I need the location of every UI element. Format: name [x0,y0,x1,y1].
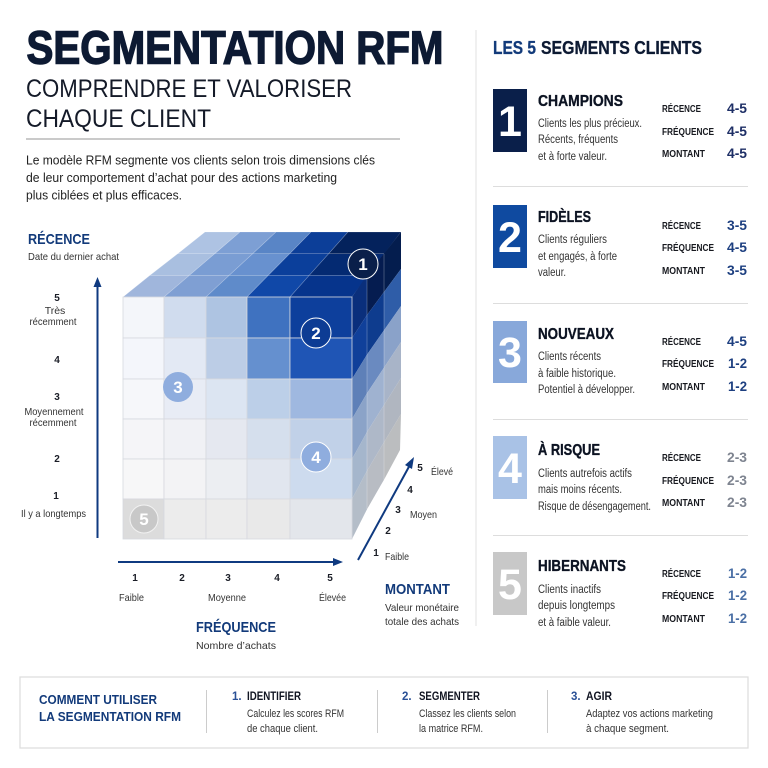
axis: récence: 4 [54,355,60,366]
segment 4: à risque: 2-3 [727,494,747,510]
segment 2: fidèles: RÉCENCE [662,219,701,232]
segment 4: à risque: MONTANT [662,498,705,509]
segment 5: hibernants [493,552,747,629]
axis: montant [358,457,459,628]
how-to heading [39,692,181,724]
subtitle [26,75,352,133]
axis: récence: récemment [30,417,77,429]
segment 2: fidèles: 4-5 [727,239,747,255]
segment 2: fidèles: FIDÈLES [538,207,591,226]
segment 1: champions: MONTANT [662,149,705,160]
step 3: AGIR [586,691,613,703]
how-to heading: COMMENT UTILISER [39,692,158,707]
axis: montant: 2 [385,526,391,537]
step 3: 3. [571,691,581,703]
segment 2: fidèles: valeur. [538,267,566,279]
segment 1: champions: 4-5 [727,100,747,116]
segment 2: fidèles: 2 [498,214,522,262]
segment 5: hibernants: RÉCENCE [662,567,701,580]
segment 4: à risque: mais moins récents. [538,484,622,496]
segment 1: champions: CHAMPIONS [538,93,623,110]
segment 5: hibernants: FRÉQUENCE [662,589,714,602]
segment 2: fidèles: 3-5 [727,217,747,233]
cube top face [123,232,401,297]
step 2: Classez les clients selon [419,708,516,720]
segments heading: SEGMENTS CLIENTS [541,38,702,58]
segments heading: LES 5 [493,38,536,58]
marker 3: 3 [173,378,183,397]
axis: récence: 1 [53,491,59,502]
cube front face [123,297,352,539]
segment 3: nouveaux: RÉCENCE [662,335,701,348]
axis: fréquence: 5 [327,573,333,584]
step 1: IDENTIFIER [247,691,302,703]
segment 2: fidèles: Clients réguliers [538,234,607,246]
segment 3: nouveaux: 1-2 [728,355,747,371]
step 2: la matrice RFM. [419,723,483,735]
marker 3 [163,372,193,402]
step 1: de chaque client. [247,723,318,735]
axis: fréquence: Moyenne [208,592,246,604]
step 3 [571,691,713,735]
segment 3: nouveaux: Clients récents [538,351,601,363]
segment 1: champions: 1 [498,98,522,146]
segment 5: hibernants: HIBERNANTS [538,558,626,575]
segment 3: nouveaux [493,321,747,396]
axis: récence: Très [45,305,65,317]
marker 1: 1 [358,255,368,274]
title: SEGMENTATION RFM [26,22,444,74]
axis: fréquence: 1 [132,573,138,584]
marker 5: 5 [139,510,149,529]
segment 4: à risque: Clients autrefois actifs [538,468,632,480]
step 3: Adaptez vos actions marketing [586,708,713,720]
intro text: de leur comportement d’achat pour des actions marketing [26,171,337,185]
axis: récence: 5 [54,293,60,304]
segment 5: hibernants: et à faible valeur. [538,617,611,629]
step 2: SEGMENTER [419,691,481,703]
segment 2: fidèles: MONTANT [662,266,705,277]
segment 3: nouveaux: FRÉQUENCE [662,357,714,370]
RFM cube chart [123,232,401,539]
axis: fréquence [118,558,346,652]
axis: fréquence: 4 [274,573,280,584]
segment 2: fidèles: FRÉQUENCE [662,241,714,254]
intro text: plus ciblées et plus efficaces. [26,188,182,202]
step 2 [402,691,516,735]
step 3: à chaque segment. [586,723,669,735]
segment 3: nouveaux: 4-5 [727,333,747,349]
axis: fréquence: 3 [225,573,231,584]
axis: récence: 2 [54,454,60,465]
step 2: 2. [402,691,412,703]
subtitle: COMPRENDRE ET VALORISER [26,75,352,103]
segment 1: champions: Clients les plus précieux. [538,118,642,130]
segment 4: à risque: Risque de désengagement. [538,501,651,513]
segment 1: champions: Récents, fréquents [538,134,618,146]
axis: récence: Il y a longtemps [21,508,86,520]
marker 4: 4 [311,448,321,467]
axis: récence: Date du dernier achat [28,251,119,263]
segments heading [493,38,702,58]
axis: récence: RÉCENCE [28,231,90,248]
axis: montant: 5 [417,463,423,474]
intro text: Le modèle RFM segmente vos clients selon trois dimensions clés [26,154,375,168]
axis: montant: MONTANT [385,581,450,598]
marker 2 [301,318,331,348]
segment 4: à risque [493,436,747,513]
panel: how to use [20,677,748,748]
axis: fréquence: 2 [179,573,185,584]
segment 5: hibernants: 1-2 [728,565,747,581]
axis: montant: totale des achats [385,616,459,628]
axis: récence: 3 [54,392,60,403]
axis: récence: récemment [30,316,77,328]
segment 2: fidèles [493,205,747,279]
segment 3: nouveaux: 1-2 [728,378,747,394]
axis: montant: Valeur monétaire [385,602,459,614]
axis: montant: Faible [385,551,409,563]
how-to heading: LA SEGMENTATION RFM [39,709,181,724]
segment 5: hibernants: MONTANT [662,614,705,625]
axis: récence [21,231,119,538]
step 1 [232,691,344,735]
segment 3: nouveaux: 3 [498,329,522,377]
segment 5: hibernants: Clients inactifs [538,584,601,596]
segment 1: champions: 4-5 [727,145,747,161]
axis: montant: 3 [395,505,401,516]
segment 3: nouveaux: NOUVEAUX [538,326,614,343]
segment 2: fidèles: et engagés, à forte [538,251,617,263]
segment 4: à risque: RÉCENCE [662,451,701,464]
segment 5: hibernants: 5 [498,561,522,609]
segment 3: nouveaux: Potentiel à développer. [538,384,635,396]
segment 1: champions [493,89,747,163]
segment 1: champions: 4-5 [727,123,747,139]
segment 3: nouveaux: à faible historique. [538,368,616,380]
cube right face [352,232,401,539]
step 1: 1. [232,691,242,703]
intro text [26,154,375,202]
axis: montant: 1 [373,548,379,559]
marker 1 [348,249,378,279]
axis: montant: 4 [407,485,413,496]
segment 3: nouveaux: MONTANT [662,382,705,393]
marker 4 [301,442,331,472]
segment 5: hibernants: 1-2 [728,587,747,603]
segment 4: à risque: À RISQUE [538,440,600,459]
segment 1: champions: FRÉQUENCE [662,125,714,138]
axis: fréquence: Faible [119,592,144,604]
segment 1: champions: et à forte valeur. [538,151,607,163]
segment 4: à risque: FRÉQUENCE [662,474,714,487]
axis: fréquence: FRÉQUENCE [196,619,276,636]
marker 5 [130,505,158,533]
segment 2: fidèles: 3-5 [727,262,747,278]
segment 4: à risque: 4 [498,445,522,493]
marker 2: 2 [311,324,321,343]
segment 4: à risque: 2-3 [727,472,747,488]
axis: montant: Élevé [431,465,453,478]
segment 5: hibernants: depuis longtemps [538,600,615,612]
step 1: Calculez les scores RFM [247,708,344,720]
segment 1: champions: RÉCENCE [662,102,701,115]
segment 4: à risque: 2-3 [727,449,747,465]
axis: montant: Moyen [410,509,437,521]
subtitle: CHAQUE CLIENT [26,105,211,133]
axis: récence: Moyennement [24,406,84,418]
axis: fréquence: Élevée [319,591,346,604]
axis: fréquence: Nombre d’achats [196,640,276,652]
segment 5: hibernants: 1-2 [728,610,747,626]
